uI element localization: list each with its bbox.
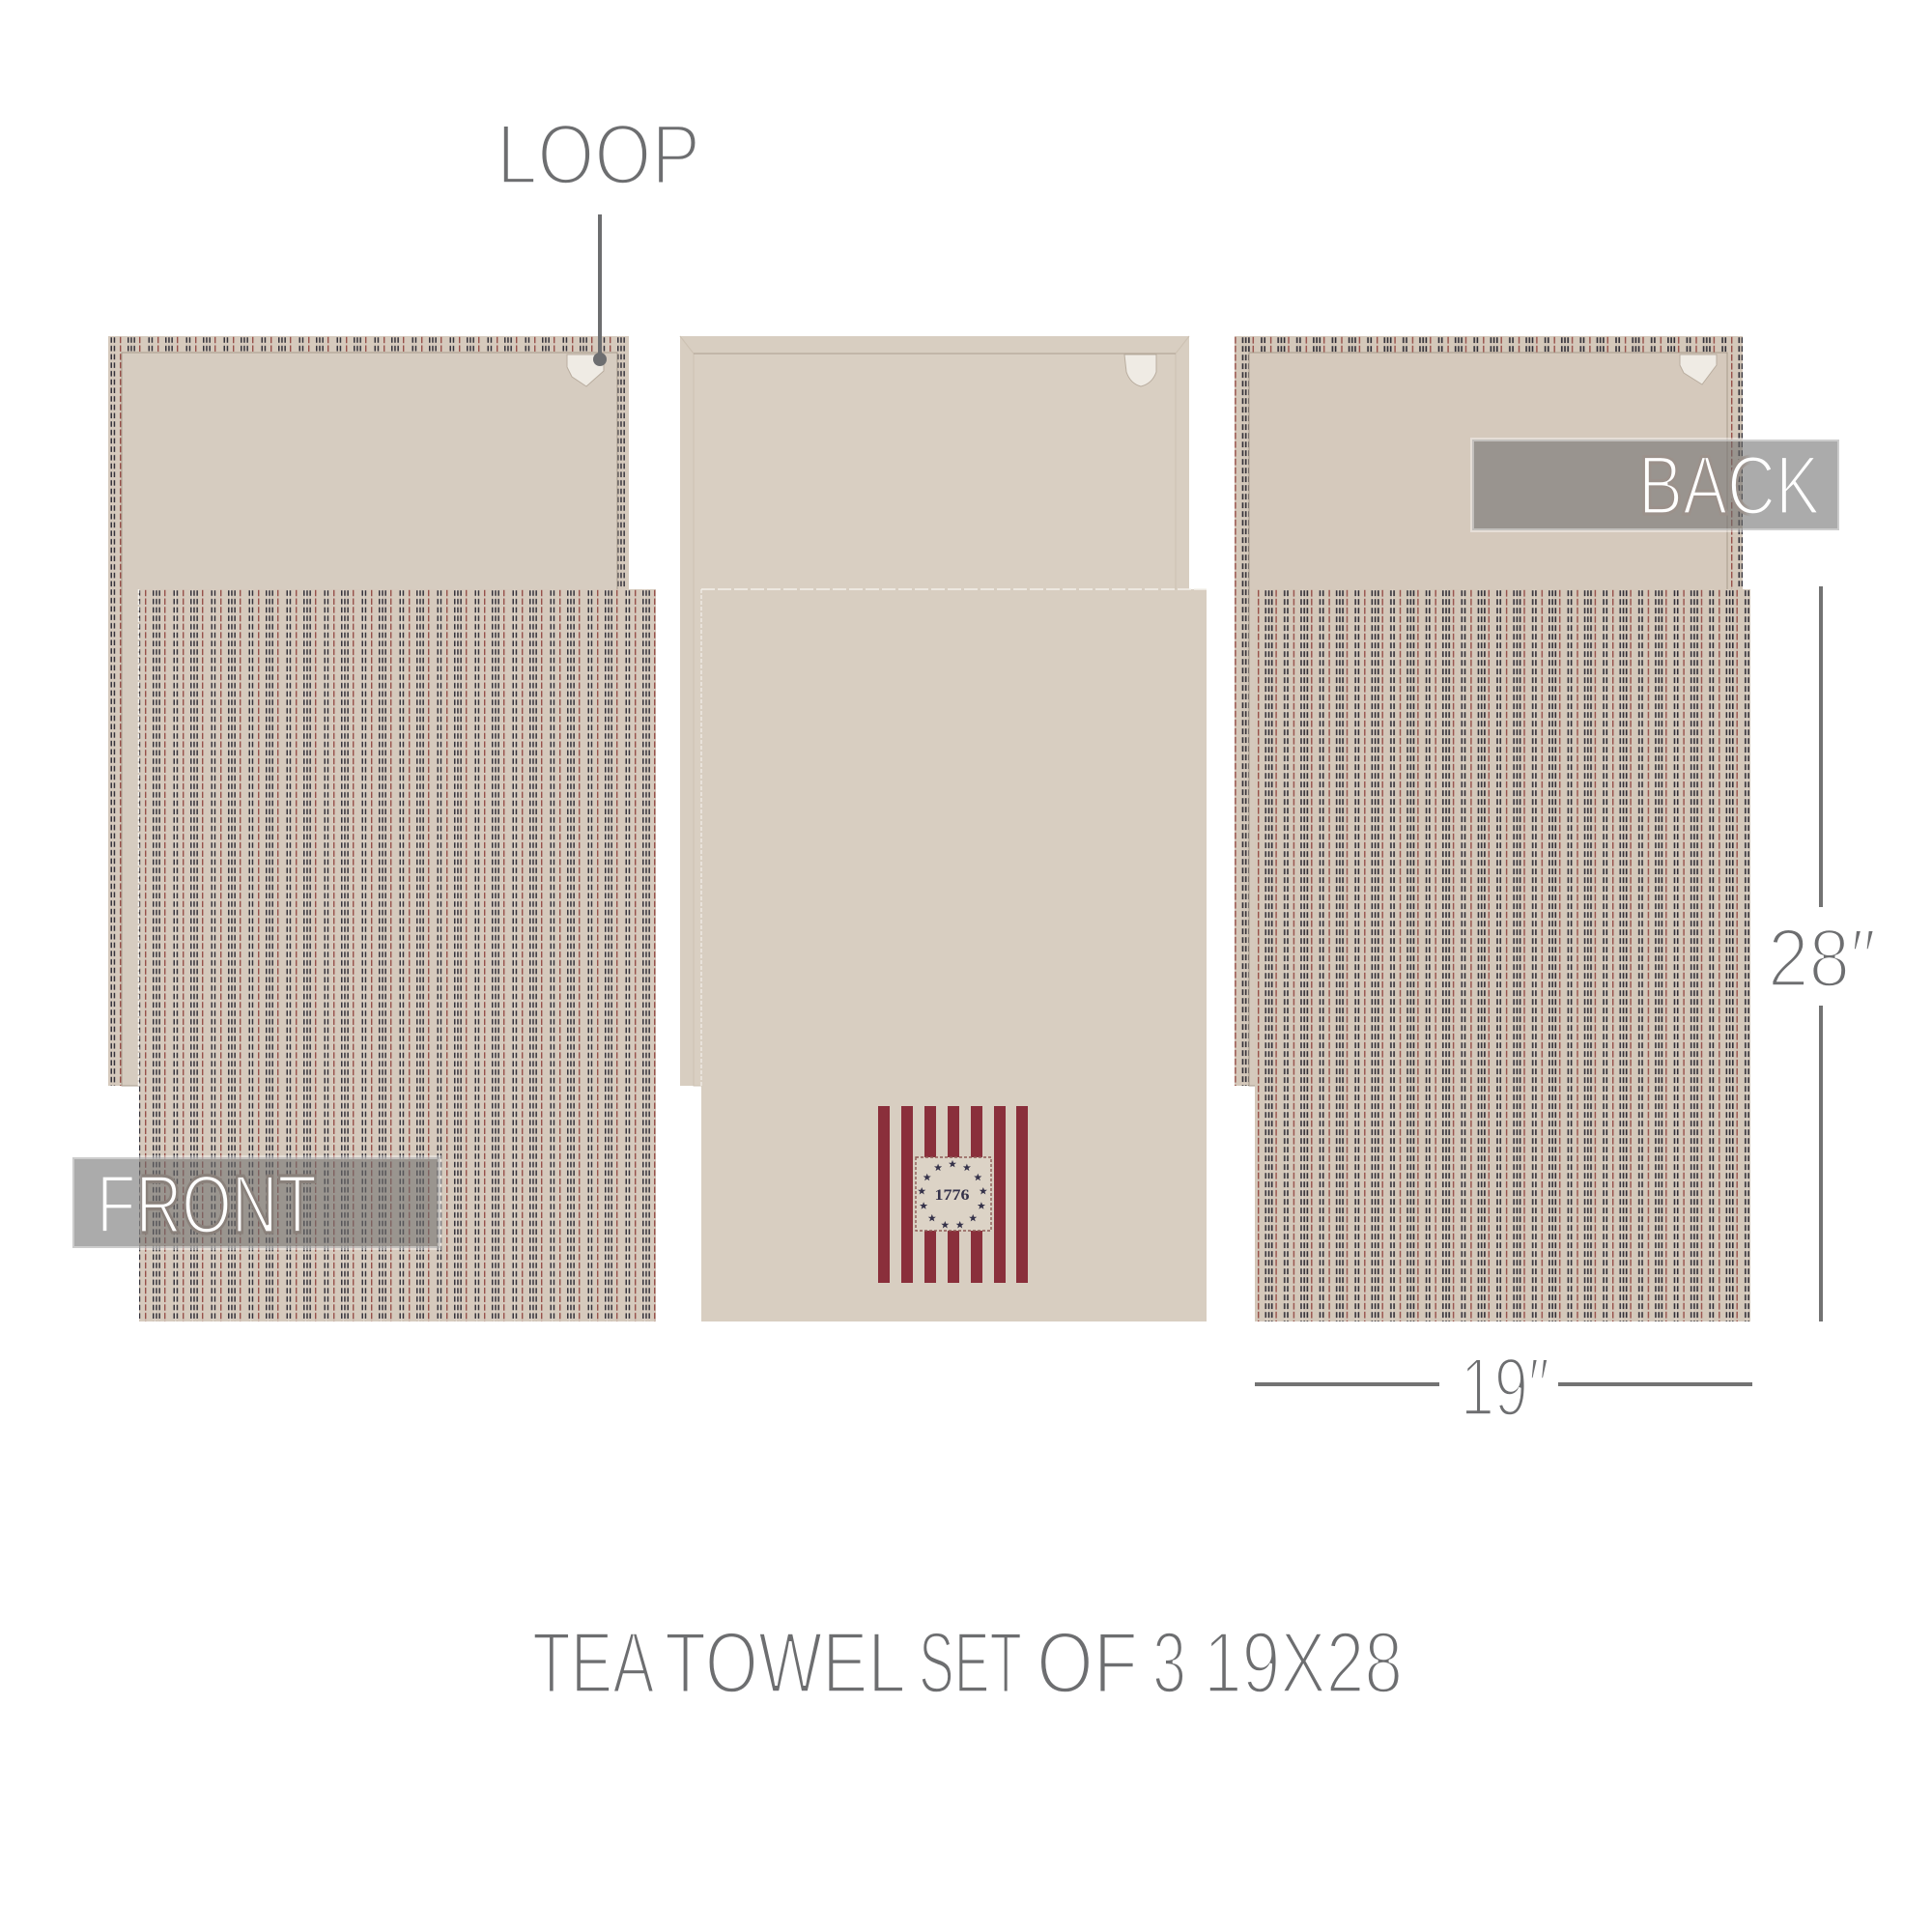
dimension: width 19 inches: 19″ <box>1461 1342 1549 1434</box>
callout: FRONT label: FRONT <box>97 1159 317 1251</box>
title: 19X28 <box>1204 1615 1403 1712</box>
icon: left towel hanging loop <box>567 355 604 386</box>
icon: 1776 flag <box>878 1106 1028 1283</box>
dimension: height 28 inches <box>1768 586 1876 1321</box>
title: OF <box>1037 1615 1138 1712</box>
title: 3 <box>1152 1615 1186 1712</box>
icon: right towel hanging loop <box>1680 355 1717 384</box>
dimension: width 19 inches <box>1255 1342 1752 1434</box>
arrow: loop pointer <box>593 214 607 366</box>
panel: middle towel back <box>680 336 1189 1086</box>
icon: middle towel hanging loop <box>1124 355 1156 386</box>
callout: LOOP label: LOOP <box>497 106 700 202</box>
callout: BACK label: BACK <box>1638 440 1820 532</box>
title: TEA <box>532 1615 655 1712</box>
icon: 1776 flag: 1776 <box>935 1187 970 1204</box>
panel: right towel front <box>1255 589 1750 1321</box>
panel: middle towel front with flag print <box>701 589 1207 1321</box>
panel: left towel back <box>108 336 629 1086</box>
panel: right towel back <box>1235 336 1743 1086</box>
dimension: height 28 inches: 28″ <box>1768 913 1876 1005</box>
callout: BACK label <box>1472 440 1839 532</box>
title: TOWEL <box>665 1615 904 1712</box>
title: SET <box>919 1615 1021 1712</box>
panel: left towel front <box>139 589 656 1321</box>
